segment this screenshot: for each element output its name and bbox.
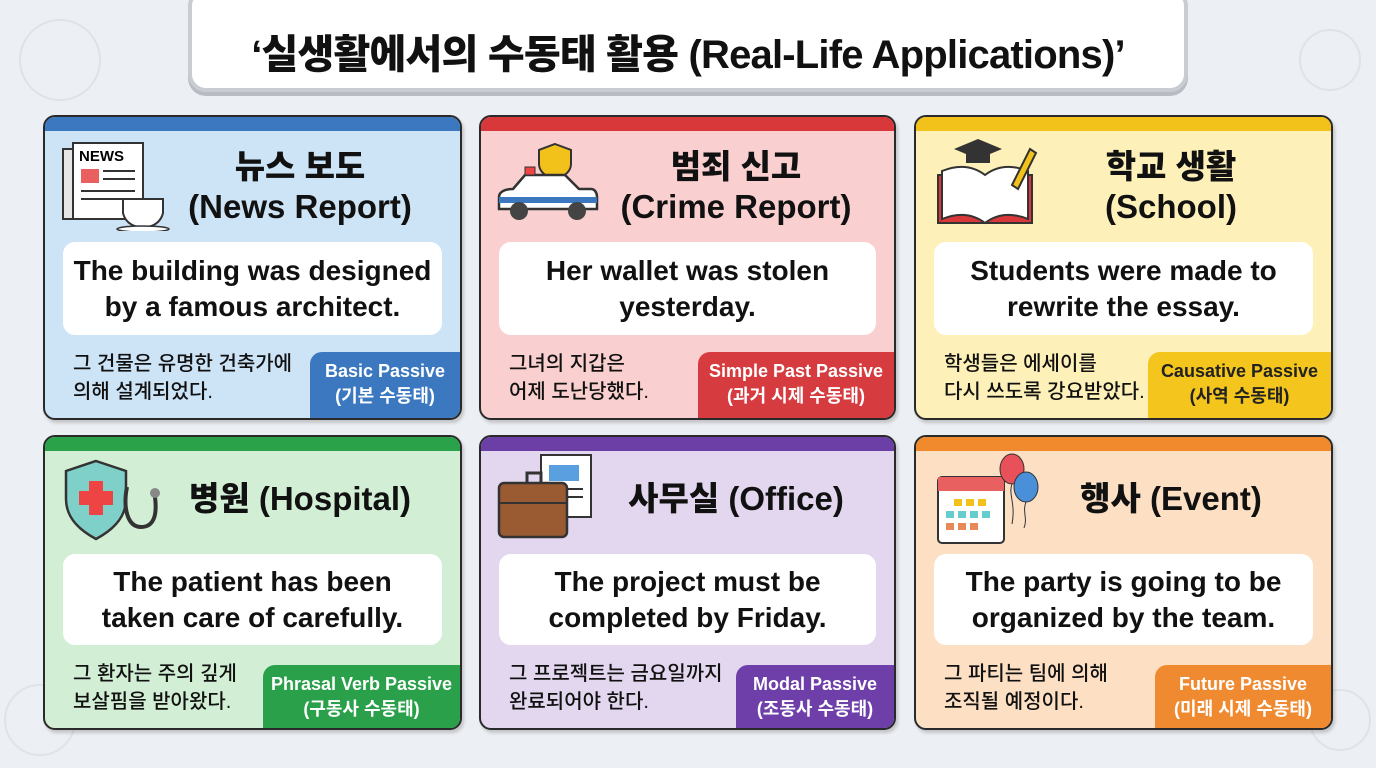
example sentence xyxy=(499,242,876,335)
icon: police car xyxy=(498,142,598,220)
heading xyxy=(1105,148,1237,225)
badge: (조동사 수동태) xyxy=(757,699,873,719)
icon: calendar and balloons xyxy=(937,454,1038,544)
icon: book and cap xyxy=(937,139,1038,224)
badge: Future Passive xyxy=(1179,674,1307,694)
korean translation xyxy=(944,353,1145,403)
example sentence: The party is going to be xyxy=(966,566,1281,596)
badge: Modal Passive xyxy=(753,674,877,694)
example sentence: The patient has been xyxy=(113,566,392,596)
example sentence: The project must be xyxy=(554,566,821,596)
heading: 범죄 신고 xyxy=(671,148,801,185)
panel: crime report xyxy=(479,115,896,420)
example sentence xyxy=(934,242,1313,335)
korean translation: 조직될 예정이다. xyxy=(944,691,1084,713)
title xyxy=(188,0,1188,92)
heading: (News Report) xyxy=(188,188,412,225)
example sentence: The building was designed xyxy=(74,254,431,286)
korean translation: 학생들은 에세이를 xyxy=(944,353,1097,375)
title: ‘실생활에서의 수동태 활용 (Real-Life Applications)’ xyxy=(251,33,1125,77)
heading: 사무실 (Office) xyxy=(628,480,844,517)
badge xyxy=(310,352,460,418)
badge: Basic Passive xyxy=(325,361,445,381)
badge: Phrasal Verb Passive xyxy=(271,674,452,694)
heading: 행사 (Event) xyxy=(1080,480,1262,517)
korean translation: 보살핌을 받아왔다. xyxy=(73,691,231,713)
icon: newspaper and coffee: NEWS xyxy=(79,148,124,165)
korean translation xyxy=(944,663,1108,713)
korean translation: 그 환자는 주의 깊게 xyxy=(73,663,237,685)
icon: briefcase and documents xyxy=(498,454,592,538)
heading xyxy=(188,148,412,225)
badge: (미래 시제 수동태) xyxy=(1174,699,1312,719)
example sentence xyxy=(63,554,442,645)
example sentence xyxy=(499,554,876,645)
example sentence: Students were made to xyxy=(970,254,1277,286)
korean translation xyxy=(73,663,237,713)
example sentence: yesterday. xyxy=(619,290,756,322)
korean translation xyxy=(73,353,292,403)
panel: news report xyxy=(43,115,462,420)
korean translation: 그 프로젝트는 금요일까지 xyxy=(509,663,723,685)
icon: newspaper and coffee xyxy=(62,142,170,231)
badge: (기본 수동태) xyxy=(335,386,435,406)
panel: school xyxy=(914,115,1333,420)
example sentence: organized by the team. xyxy=(972,602,1275,632)
example sentence: Her wallet was stolen xyxy=(546,254,829,286)
heading: 학교 생활 xyxy=(1106,148,1236,185)
heading: 병원 (Hospital) xyxy=(189,480,411,517)
badge: (구동사 수동태) xyxy=(303,699,420,719)
heading: (Crime Report) xyxy=(620,188,852,225)
badge xyxy=(736,665,894,728)
example sentence xyxy=(63,242,442,335)
badge: Causative Passive xyxy=(1161,361,1318,381)
badge xyxy=(1155,665,1331,728)
korean translation xyxy=(509,353,649,403)
badge xyxy=(698,352,894,418)
icon: shield and stethoscope xyxy=(64,460,160,540)
example sentence xyxy=(934,554,1313,645)
panel: office xyxy=(479,435,896,730)
korean translation: 그 건물은 유명한 건축가에 xyxy=(73,353,292,375)
example sentence: by a famous architect. xyxy=(105,290,400,322)
example sentence: rewrite the essay. xyxy=(1007,290,1240,322)
korean translation xyxy=(509,663,723,713)
panel: event xyxy=(914,435,1333,730)
heading: 뉴스 보도 xyxy=(235,148,365,185)
panel: hospital xyxy=(43,435,462,730)
badge: Simple Past Passive xyxy=(709,361,883,381)
heading xyxy=(620,148,852,225)
korean translation: 완료되어야 한다. xyxy=(509,691,649,713)
badge: (과거 시제 수동태) xyxy=(727,386,865,406)
example sentence: taken care of carefully. xyxy=(102,602,403,632)
korean translation: 어제 도난당했다. xyxy=(509,381,649,403)
badge xyxy=(263,665,460,728)
korean translation: 그 파티는 팀에 의해 xyxy=(944,663,1108,685)
example sentence: completed by Friday. xyxy=(548,602,826,632)
heading: (School) xyxy=(1105,188,1237,225)
korean translation: 다시 쓰도록 강요받았다. xyxy=(944,381,1145,403)
badge xyxy=(1148,352,1331,418)
korean translation: 그녀의 지갑은 xyxy=(509,353,625,375)
korean translation: 의해 설계되었다. xyxy=(73,381,213,403)
badge: (사역 수동태) xyxy=(1190,386,1289,406)
